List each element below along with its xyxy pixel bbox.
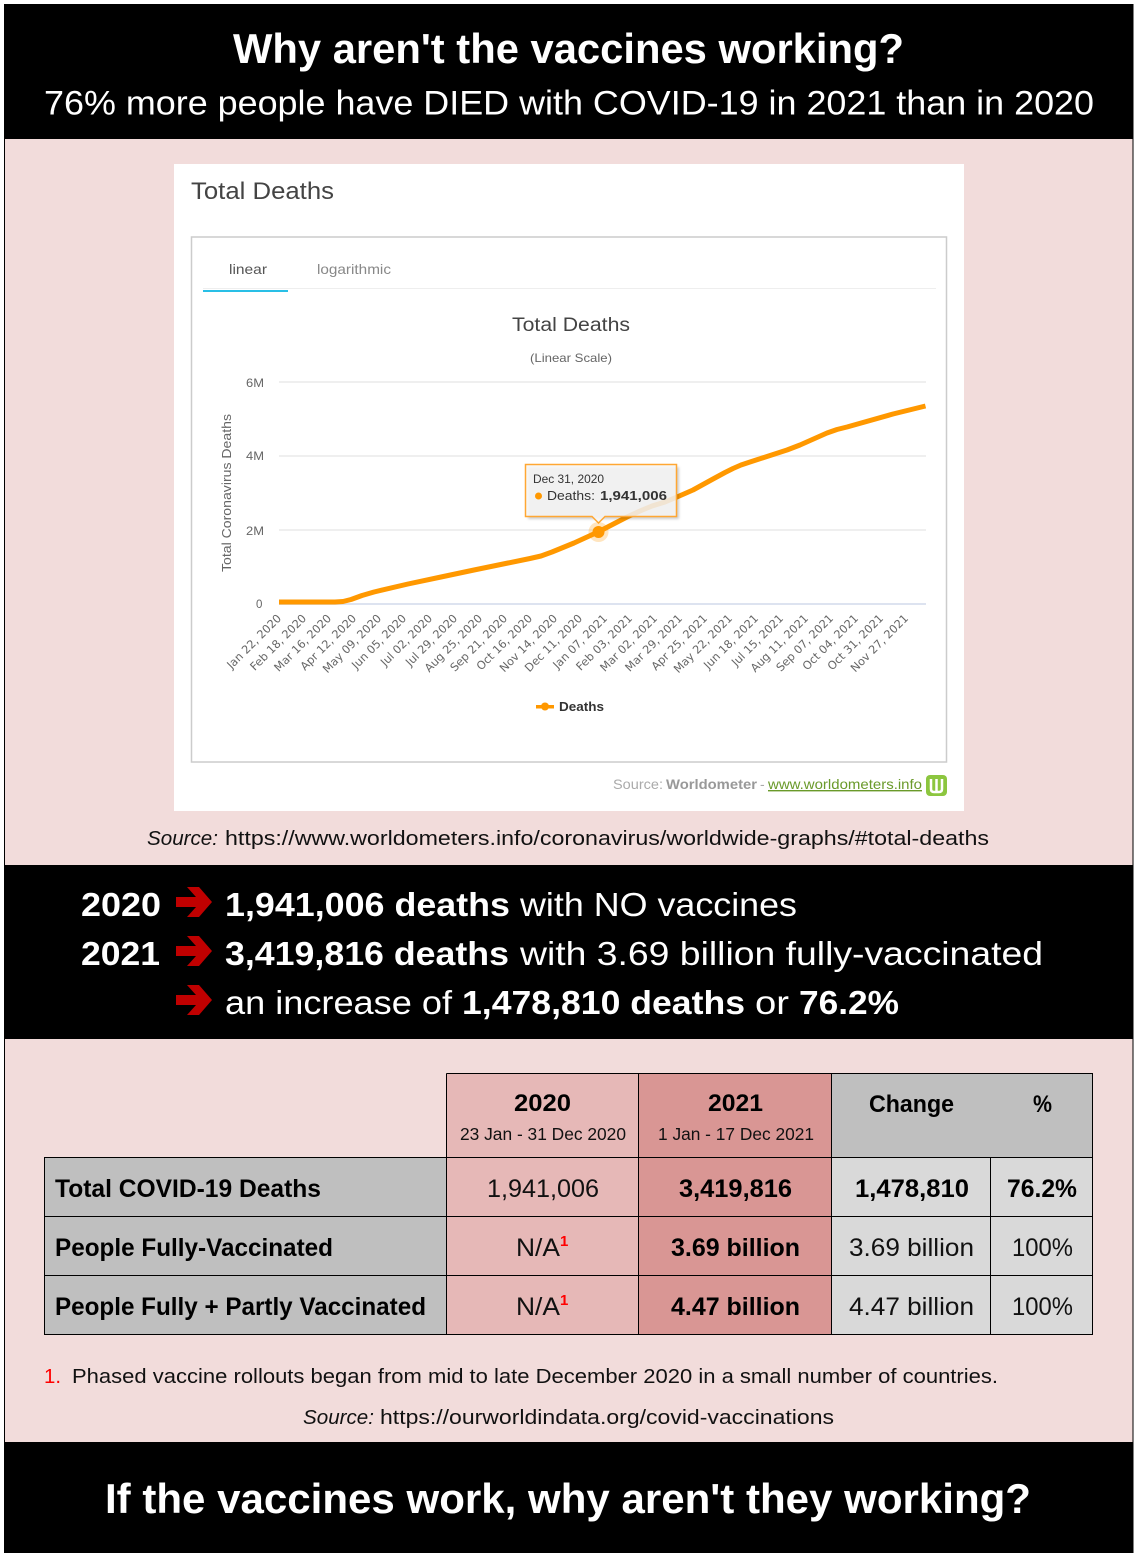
table header: 2021: 2021 [708, 1090, 763, 1117]
chart subtitle: (Linear Scale) [530, 351, 612, 365]
line: increase: 76.2% [799, 984, 899, 1021]
line: 2021 deaths: with 3.69 billion fully-vaccinated [519, 935, 1043, 972]
row: fully vaccinated: N/A [516, 1234, 560, 1262]
footnote: Phased vaccine rollouts began from mid to late December 2020 in a small number of countries. [72, 1366, 998, 1388]
arrow [176, 985, 212, 1015]
table header: 2021 [658, 1090, 814, 1144]
x-axis date labels: Sep 07, 2021 [774, 612, 836, 674]
line: increase: an increase of [225, 984, 453, 1021]
footnote: 1. [44, 1366, 61, 1388]
worldometer credit: Source: [613, 776, 663, 792]
row: total deaths: 76.2% [1007, 1175, 1077, 1203]
line: 2020 deaths: 1,941,006 deaths [225, 886, 510, 923]
x-axis date labels: Jul 29, 2020 [402, 612, 460, 670]
x-axis date labels: Jan 22, 2020 [224, 612, 284, 672]
x-axis date labels: Sep 21, 2020 [448, 612, 510, 674]
x-axis date labels: Dec 11, 2020 [522, 612, 585, 675]
x-axis date labels: Aug 25, 2020 [422, 612, 485, 675]
row: total deaths: 1,478,810 [855, 1175, 969, 1203]
line: 2020 deaths: 2020 [81, 886, 161, 923]
x-axis date labels: Apr 25, 2021 [649, 612, 710, 673]
y-axis labels: 2M [246, 526, 264, 538]
chart tabs: linear [229, 261, 267, 277]
worldometer credit: Worldometer [666, 776, 758, 792]
worldometer credit: - [760, 776, 765, 792]
x-axis date labels: Feb 03, 2021 [574, 612, 635, 673]
x-axis date labels: Mar 29, 2021 [623, 612, 685, 674]
row: fully vaccinated [55, 1233, 1073, 1262]
chart source line: Source: [147, 828, 218, 850]
table header: percent: % [1033, 1091, 1052, 1118]
y-axis title: Total Coronavirus Deaths [220, 414, 234, 572]
x-axis date labels: Feb 18, 2020 [248, 612, 309, 673]
chart tabs: logarithmic [317, 261, 391, 277]
panel: worldometer chart screenshot [174, 164, 964, 811]
table source line: Source: [303, 1407, 374, 1429]
line: increase [176, 984, 899, 1021]
table header: 2020 [460, 1090, 626, 1144]
legend: Deaths [559, 699, 604, 714]
y-axis labels: 0 [256, 599, 262, 611]
row: fully and partly vaccinated: People Fully + Partly Vaccinated [55, 1293, 426, 1321]
x-axis date labels: Oct 16, 2020 [474, 612, 535, 673]
tooltip: Deaths: [547, 488, 595, 503]
line: 2020 deaths: with NO vaccines [519, 886, 797, 923]
row: fully vaccinated: 3.69 billion [849, 1234, 974, 1262]
data line: deaths [279, 406, 926, 602]
chart title: Total Deaths [512, 315, 630, 336]
panel: table section background [5, 1039, 1133, 1442]
arrow [176, 887, 212, 917]
row: fully and partly vaccinated: 1 [560, 1292, 568, 1309]
panel: chart section background [5, 139, 1133, 865]
x-axis date labels: May 22, 2021 [671, 612, 735, 676]
tooltip: Dec 31, 2020 [533, 474, 604, 486]
closing banner [5, 1442, 1133, 1552]
x-axis date labels: Nov 14, 2020 [497, 612, 560, 675]
icon: worldometer logo [926, 775, 947, 796]
row: fully and partly vaccinated: N/A [516, 1293, 560, 1321]
y-axis labels [246, 378, 264, 611]
table header: 2020: 23 Jan - 31 Dec 2020 [460, 1124, 626, 1144]
row: fully and partly vaccinated: 4.47 billion [849, 1293, 974, 1321]
x-axis date labels: Mar 02, 2021 [598, 612, 660, 674]
tooltip [526, 464, 679, 523]
x-axis date labels: Jul 02, 2020 [377, 612, 435, 670]
x-axis date labels: Oct 04, 2021 [800, 612, 861, 673]
line: increase: 1,478,810 deaths [462, 984, 745, 1021]
table header: 2021: 1 Jan - 17 Dec 2021 [658, 1124, 814, 1144]
row: total deaths: Total COVID-19 Deaths [55, 1175, 321, 1203]
line chart: total deaths [220, 378, 926, 714]
chart card heading: Total Deaths [191, 178, 334, 205]
row: fully vaccinated: 1 [560, 1233, 568, 1250]
x-axis date labels: Aug 11, 2021 [748, 612, 811, 675]
x-axis date labels: Jun 05, 2020 [349, 612, 409, 672]
line: 2021 deaths: 2021 [81, 935, 160, 972]
line: 2021 deaths: 3,419,816 deaths [225, 935, 509, 972]
table header: 2020: 2020 [514, 1090, 571, 1117]
subtitle: 76% more people have DIED with COVID-19 in 2021 than in 2020 [44, 84, 1094, 122]
arrow [176, 936, 212, 966]
table source line: https://ourworldindata.org/covid-vaccinations [380, 1407, 834, 1429]
x-axis date labels: Jul 15, 2021 [728, 612, 786, 670]
title: Why aren't the vaccines working? [233, 25, 904, 72]
line: 2020 deaths [81, 886, 797, 923]
x-axis date labels: Jan 07, 2021 [550, 612, 610, 672]
row: total deaths: 3,419,816 [679, 1175, 792, 1203]
row: fully vaccinated: People Fully-Vaccinated [55, 1234, 333, 1262]
row: total deaths [55, 1175, 1077, 1203]
row: fully vaccinated: 100% [1012, 1234, 1073, 1262]
y-axis labels: 6M [246, 378, 264, 390]
highlighted data point [588, 522, 608, 542]
worldometer credit: www.worldometers.info [767, 776, 922, 792]
comparison table [44, 1073, 1092, 1334]
x-axis date labels: Oct 31, 2021 [825, 612, 886, 673]
x-axis date labels: Nov 27, 2021 [848, 612, 911, 675]
x-axis date labels: Apr 12, 2020 [298, 612, 359, 673]
row: total deaths: 1,941,006 [487, 1175, 599, 1203]
line: 2021 deaths [81, 935, 1043, 972]
row: fully and partly vaccinated: 100% [1012, 1293, 1073, 1321]
x-axis date labels: Jun 18, 2021 [701, 612, 761, 672]
x-axis date labels [224, 612, 911, 676]
chart tabs [203, 261, 936, 292]
row: fully and partly vaccinated: 4.47 billion [671, 1293, 800, 1321]
worldometer credit [613, 776, 922, 792]
chart source line: https://www.worldometers.info/coronavirus/worldwide-graphs/#total-deaths [225, 828, 989, 850]
row: fully vaccinated: 3.69 billion [671, 1234, 800, 1262]
y-axis labels: 4M [246, 451, 264, 463]
tooltip: 1,941,006 [600, 488, 667, 503]
legend [536, 699, 604, 714]
table header: change: Change [869, 1091, 954, 1118]
x-axis date labels: Mar 16, 2020 [272, 612, 334, 674]
closing question: If the vaccines work, why aren't they working? [105, 1475, 1031, 1522]
header banner [5, 5, 1133, 139]
panel: key figures band [5, 865, 1133, 1039]
row: fully and partly vaccinated [55, 1292, 1073, 1321]
x-axis date labels: May 09, 2020 [320, 612, 384, 676]
line: increase: or [755, 984, 789, 1021]
